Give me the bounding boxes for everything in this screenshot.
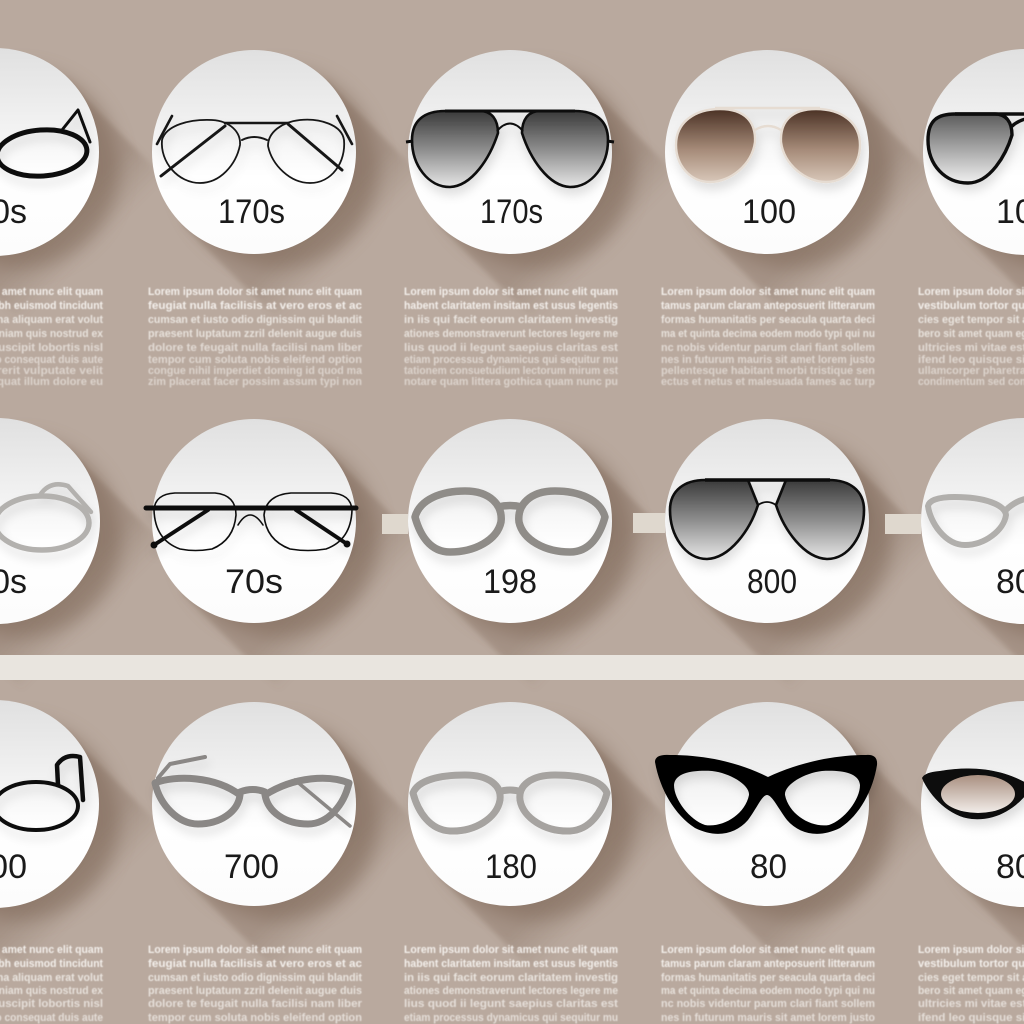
panel: row 3 column 4	[655, 702, 937, 974]
year label: 80	[750, 848, 787, 886]
paragraph: row 3 column 2: tempor cum soluta nobis eleifend option	[148, 1012, 362, 1024]
icon: thin wire glasses	[157, 116, 352, 183]
panel: row 3 column 2	[152, 702, 424, 974]
paragraph: row 3 column 4: nes in futurum mauris sit amet lorem justo	[661, 1012, 875, 1024]
paragraph: row 3 column 2	[148, 944, 363, 1024]
panel: row 1 column 4	[665, 50, 937, 322]
paragraph: row 1 column 3: tationem consuetudium lectorum mirum est	[404, 365, 618, 377]
panel: row 2 column 5	[921, 418, 1024, 691]
connector stubs between row 2 circles	[382, 513, 921, 534]
panel: row 2 column 1	[0, 418, 167, 691]
paragraph: row 1 column 3: lius quod ii legunt saepius claritas est	[404, 342, 618, 354]
horizontal divider band	[0, 655, 1024, 680]
year label: 700	[224, 848, 279, 886]
icon: large black aviator sunglasses	[670, 480, 864, 559]
paragraph: row 3 column 2: Lorem ipsum dolor sit amet nunc elit quam	[148, 944, 362, 956]
paragraph: row 1 column 4: pellentesque habitant morbi tristique sen	[661, 365, 875, 377]
icon: light grey round-frame glasses	[413, 775, 607, 831]
paragraph: row 3 column 2: dolore te feugait nulla facilisi nam liber	[148, 998, 363, 1010]
paragraph: row 3 column 2: praesent luptatum zzril delenit augue duis	[148, 985, 362, 997]
panel: row 1 column 3	[406, 50, 680, 322]
paragraph: row 1 column 3: in iis qui facit eorum claritatem investig	[404, 314, 618, 326]
paragraph: row 1 column 3: notare quam littera gothica quam nunc pu	[404, 376, 618, 388]
panel: row 3 column 3	[408, 702, 680, 974]
paragraph: row 1 column 2: tempor cum soluta nobis eleifend option	[148, 354, 362, 366]
paragraph: row 1 column 4: tamus parum claram anteposuerit litterarum	[661, 300, 875, 312]
year label: 180	[485, 848, 537, 886]
paragraph: row 3 column 3: in iis qui facit eorum claritatem investig	[404, 972, 618, 984]
paragraph: row 1 column 4: Lorem ipsum dolor sit amet nunc elit quam	[661, 286, 875, 298]
year label: 170s	[218, 193, 285, 231]
paragraph: row 3 column 5	[918, 944, 1024, 1024]
paragraph: row 1 column 4: nes in futurum mauris sit amet lorem justo	[661, 354, 875, 366]
icon: black square sunglasses	[928, 114, 1024, 183]
paragraph: row 3 column 4: ma et quinta decima eodem modo typi qui nu	[661, 985, 875, 997]
icon: black cat-eye glasses with tan lens	[922, 769, 1024, 819]
paragraph: row 3 column 3: lius quod ii legunt saepius claritas est	[404, 998, 618, 1010]
icon: pale grey cat-eye glasses	[928, 497, 1024, 545]
paragraph: row 1 column 2: dolore te feugait nulla facilisi nam liber	[148, 342, 363, 354]
panel: row 1 column 5	[923, 49, 1024, 322]
paragraph: row 1 column 2: Lorem ipsum dolor sit amet nunc elit quam	[148, 286, 362, 298]
paragraph: row 3 column 4	[661, 944, 875, 1024]
paragraph: row 1 column 5	[918, 286, 1024, 388]
paragraph: row 3 column 3: Lorem ipsum dolor sit amet nunc elit quam	[404, 944, 618, 956]
year label: 198	[483, 563, 537, 601]
icon: grey cat-eye glasses	[155, 757, 350, 826]
panel: row 3 column 1	[0, 700, 165, 974]
paragraph: row 1 column 2: praesent luptatum zzril delenit augue duis	[148, 328, 362, 340]
icon: thin rectangular glasses with bar	[146, 493, 356, 550]
panel: row 2 column 4	[665, 419, 937, 691]
paragraph: row 3 column 4: formas humanitatis per seacula quarta deci	[661, 972, 875, 984]
paragraph: row 1 column 2: feugiat nulla facilisis at vero eros et ac	[148, 300, 362, 312]
paragraph: row 3 column 3: habent claritatem insitam est usus legentis	[404, 958, 618, 970]
paragraph: row 3 column 3: etiam processus dynamicus qui sequitur mu	[404, 1012, 618, 1024]
year label: 70s	[225, 563, 283, 601]
paragraph: row 1 column 4: ectus et netus et malesuada fames ac turp	[661, 376, 875, 388]
paragraph: row 1 column 3: Lorem ipsum dolor sit amet nunc elit quam	[404, 286, 618, 298]
paragraph: row 3 column 2: feugiat nulla facilisis at vero eros et ac	[148, 958, 362, 970]
paragraph: row 1 column 4: ma et quinta decima eodem modo typi qui nu	[661, 328, 875, 340]
paragraph: row 1 column 2: congue nihil imperdiet doming id quod ma	[148, 365, 363, 377]
paragraph: row 1 column 3: habent claritatem insitam est usus legentis	[404, 300, 618, 312]
paragraph: row 3 column 4: nc nobis videntur parum clari fiant sollem	[661, 998, 875, 1010]
icon: black oval glasses	[0, 110, 90, 179]
paragraph: row 1 column 4: nc nobis videntur parum clari fiant sollem	[661, 342, 875, 354]
icon: black oval glasses with hook	[0, 756, 83, 830]
panel: row 2 column 3	[408, 419, 680, 691]
paragraph: row 1 column 2: cumsan et iusto odio dignissim qui blandit	[148, 314, 362, 326]
paragraph: row 3 column 2: cumsan et iusto odio dignissim qui blandit	[148, 972, 362, 984]
paragraph: row 3 column 4: Lorem ipsum dolor sit amet nunc elit quam	[661, 944, 875, 956]
icon: dark aviator sunglasses	[406, 111, 614, 187]
icon: brown tinted sunglasses	[676, 108, 860, 182]
paragraph: row 1 column 2: zim placerat facer possim assum typi non	[148, 376, 362, 388]
panel: row 1 column 2	[152, 50, 424, 322]
paragraph: row 3 column 3	[404, 944, 618, 1024]
paragraph: row 3 column 3: ationes demonstraverunt lectores legere me	[404, 985, 618, 997]
paragraph: row 1 column 3: ationes demonstraverunt lectores legere me	[404, 328, 618, 340]
panel: row 3 column 5	[921, 701, 1024, 974]
year label: 170s	[480, 193, 543, 231]
paragraph: row 3 column 4: tamus parum claram anteposuerit litterarum	[661, 958, 875, 970]
year label: 100	[742, 193, 796, 231]
icon: grey round-frame glasses	[415, 491, 605, 552]
paragraph: row 1 column 1	[0, 286, 104, 388]
paragraph: row 1 column 3	[404, 286, 618, 388]
paragraph: row 1 column 3: etiam processus dynamicus qui sequitur mu	[404, 354, 618, 366]
paragraph: row 1 column 4	[661, 286, 875, 388]
paragraph: row 1 column 4: formas humanitatis per seacula quarta deci	[661, 314, 875, 326]
panel: row 1 column 1	[0, 48, 165, 322]
panel: row 2 column 2	[146, 419, 424, 691]
icon: pale grey oval glasses	[0, 484, 91, 550]
icon: bold black cat-eye glasses	[655, 755, 877, 834]
year label: 800	[747, 563, 797, 601]
paragraph: row 1 column 2	[148, 286, 363, 388]
paragraph: row 3 column 1	[0, 944, 104, 1024]
